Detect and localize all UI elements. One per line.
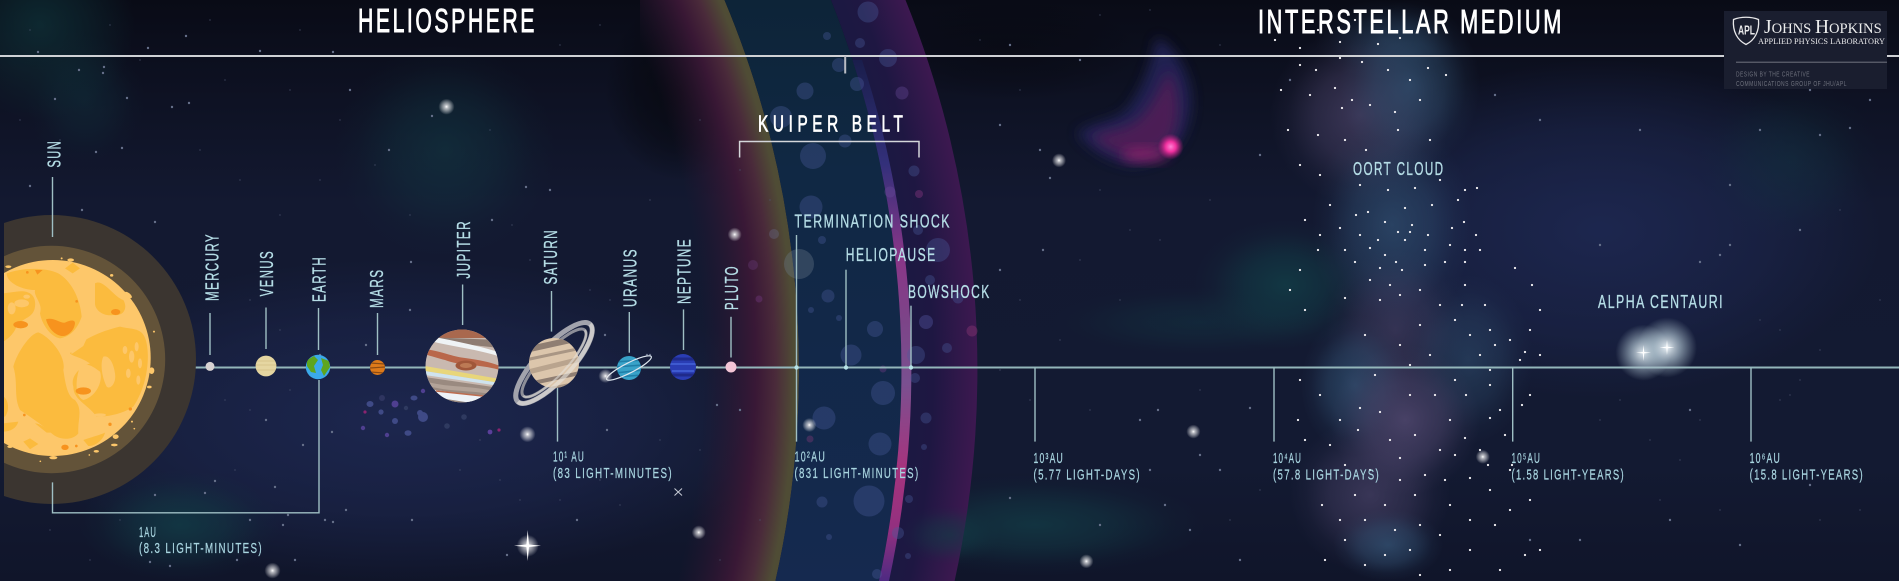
scale label: 10^4 AU: (57.8 LIGHT-DAYS) <box>1273 467 1380 483</box>
label: Sun <box>44 140 64 237</box>
scale label: 10^4 AU <box>1273 368 1380 483</box>
icon: APL shield <box>1733 17 1759 44</box>
scale label: 10^2 AU <box>794 450 920 482</box>
panel: heliosheath blue band <box>724 0 901 581</box>
planet: Mercury: MERCURY <box>201 233 222 301</box>
planet: Neptune <box>670 238 696 380</box>
planet: Mercury <box>201 233 222 371</box>
heading: Kuiper Belt with bracket: KUIPER BELT <box>758 110 908 136</box>
asteroid belt <box>361 389 501 437</box>
panel: Oort cloud nebula <box>1270 0 1533 581</box>
credit text: DESIGN BY THE CREATIVE <box>1736 70 1810 79</box>
label: Bowshock <box>908 281 991 370</box>
scale label: 10^3 AU: (5.77 LIGHT-DAYS) <box>1034 467 1141 483</box>
scale label: 10^1 AU: 10¹ AU <box>553 450 585 466</box>
planet: Mars <box>370 270 385 375</box>
credit text <box>1736 70 1847 88</box>
planet: Saturn with rings: SATURN <box>540 229 561 284</box>
heading: Heliosphere: HELIOSPHERE <box>358 2 537 39</box>
scale label: 10^2 AU: 10²AU <box>794 450 826 466</box>
scale label: 1 AU <box>139 525 263 557</box>
panel: heliopause stripe <box>852 60 911 581</box>
heading: Interstellar Medium: INTERSTELLAR MEDIUM <box>1258 3 1564 40</box>
distance axis <box>150 366 1899 368</box>
logo subline: APPLIED PHYSICS LABORATORY <box>1758 36 1885 46</box>
planet: Saturn with rings <box>513 231 595 442</box>
sun marbling <box>8 295 142 417</box>
label: Heliopause <box>844 244 937 370</box>
scale label: 10^2 AU: (831 LIGHT-MINUTES) <box>794 466 920 482</box>
planet: Uranus <box>604 248 654 384</box>
icon: four-point star <box>514 530 541 561</box>
label: Heliopause: HELIOPAUSE <box>846 244 937 265</box>
scale label: 10^5 AU <box>1512 368 1625 483</box>
Alpha Centauri: ALPHA CENTAURI <box>1598 291 1724 312</box>
scale label: 10^5 AU: 10⁵AU <box>1512 451 1541 467</box>
planet: Earth with 1 AU bracket: EARTH <box>308 256 329 302</box>
sun flares <box>5 257 155 462</box>
scale label: 1 AU: 1AU <box>139 525 157 541</box>
planet: Earth with 1 AU bracket <box>52 256 330 513</box>
nebula: comet-shaped pink cloud <box>1077 37 1191 165</box>
icon: APL shield: APL <box>1738 22 1755 38</box>
teal glow across lower band <box>900 505 1000 565</box>
planet: Mars: MARS <box>366 268 387 308</box>
sun spots <box>13 270 132 450</box>
scale label: 10^1 AU <box>553 450 673 482</box>
planet: Venus <box>256 252 276 376</box>
glowing stars <box>264 99 1490 579</box>
planet: Neptune: NEPTUNE <box>674 238 695 304</box>
planet: Pluto <box>721 265 742 372</box>
scale label: 10^6 AU: 10⁶AU <box>1750 451 1781 467</box>
Alpha Centauri <box>1598 291 1724 381</box>
Kuiper belt objects <box>748 2 978 579</box>
planet: Pluto: PLUTO <box>721 265 742 310</box>
heading: Kuiper Belt with bracket <box>740 110 919 158</box>
planet: Jupiter: JUPITER <box>453 220 474 279</box>
planet: Jupiter <box>425 220 500 404</box>
Oort cloud stars <box>1275 20 1540 575</box>
header rule <box>0 55 1899 74</box>
label: Sun: SUN <box>44 140 64 168</box>
scale label: 10^3 AU <box>1034 368 1141 483</box>
panel: outer purple bowshock band <box>831 0 977 581</box>
sun with corona rings <box>0 215 196 504</box>
label: Termination Shock <box>794 210 951 442</box>
scale label: 10^3 AU: 10³AU <box>1034 451 1064 467</box>
planet: Uranus: URANUS <box>620 248 640 307</box>
panel: termination shock band <box>640 0 799 581</box>
icon: small cross star <box>674 488 682 496</box>
label: Bowshock: BOWSHOCK <box>908 281 991 302</box>
scale label: 10^1 AU: (83 LIGHT-MINUTES) <box>553 466 673 482</box>
sun surface blobs <box>4 263 148 449</box>
panel: Johns Hopkins APL logo <box>1724 11 1887 89</box>
label: Oort Cloud: OORT CLOUD <box>1353 158 1444 179</box>
planet: Venus: VENUS <box>256 250 277 296</box>
scale label: 1 AU: (8.3 LIGHT-MINUTES) <box>139 541 263 557</box>
scale label: 10^5 AU: (1.58 LIGHT-YEARS) <box>1512 467 1625 483</box>
scale label: 10^6 AU <box>1750 368 1864 483</box>
scale label: 10^4 AU: 10⁴AU <box>1273 451 1302 467</box>
label: Termination Shock: TERMINATION SHOCK <box>794 210 951 232</box>
logo wordmark: JOHNS HOPKINS <box>1764 16 1882 38</box>
